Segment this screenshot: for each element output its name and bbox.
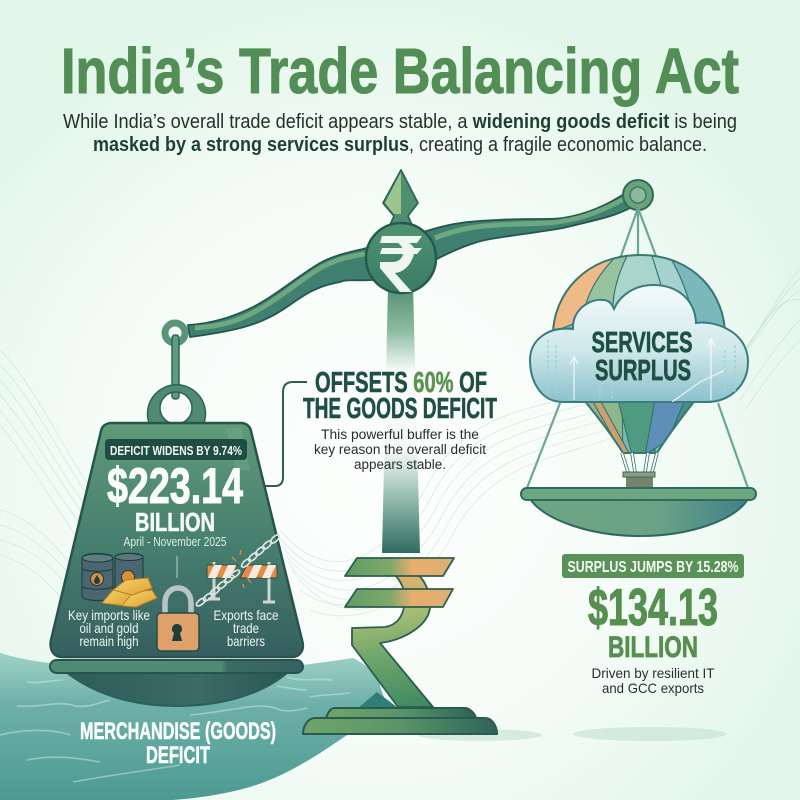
weight rim	[50, 660, 303, 673]
imports caption: remain high	[80, 633, 138, 649]
icon: gold bars	[102, 578, 157, 607]
ground shadows	[418, 727, 727, 741]
deficit growth pill	[105, 439, 247, 460]
cloud label: SERVICES	[592, 327, 692, 359]
surplus description	[592, 665, 715, 696]
deficit label: MERCHANDISE (GOODS)	[80, 718, 276, 745]
services surplus balloon	[521, 208, 756, 536]
exports caption: trade	[233, 620, 259, 636]
right beam end cap	[623, 180, 653, 210]
water	[0, 653, 385, 800]
callout description: key reason the overall deficit	[314, 442, 486, 457]
icon: sparks	[232, 550, 251, 588]
callout description: This powerful buffer is the	[321, 427, 479, 442]
deficit label: DEFICIT	[146, 742, 210, 769]
surplus panel	[562, 554, 744, 696]
balloon envelope	[545, 250, 730, 455]
balloon basket	[622, 453, 657, 489]
deficit value: $223.14	[107, 458, 243, 514]
rupee glyph	[380, 236, 422, 292]
left hook ring	[165, 323, 185, 343]
imports caption	[68, 607, 150, 649]
cloud label: SURPLUS	[595, 355, 691, 387]
icon: oil barrels	[82, 553, 143, 600]
exports caption: Exports face	[214, 607, 279, 623]
imports caption: Key imports like	[68, 607, 150, 623]
deficit period: April - November 2025	[124, 535, 227, 549]
icon: broken chain	[195, 533, 281, 607]
surplus growth pill	[562, 554, 744, 578]
weight body	[51, 423, 303, 657]
subtitle	[63, 111, 737, 156]
cloud label	[592, 327, 692, 387]
surplus description: and GCC exports	[602, 680, 704, 696]
surplus description: Driven by resilient IT	[592, 665, 715, 681]
stand base	[303, 692, 497, 734]
imports caption: oil and gold	[80, 620, 138, 636]
icon: trade barriers	[207, 562, 277, 602]
spear finial	[383, 170, 418, 225]
central rupee medallion	[366, 223, 436, 293]
deficit label	[80, 718, 276, 769]
background wave lines	[0, 268, 800, 640]
callout description	[314, 427, 486, 472]
balloon strings	[527, 208, 748, 488]
deficit growth pill: DEFICIT WIDENS BY 9.74%	[110, 443, 242, 458]
balance pan	[521, 488, 756, 536]
callout connector	[265, 382, 307, 486]
icon: padlock	[157, 588, 199, 651]
exports caption: barriers	[227, 633, 265, 649]
surplus value: $134.13	[588, 579, 718, 637]
balance beam	[165, 170, 653, 343]
exports caption	[214, 607, 279, 649]
icon: rupee symbol	[345, 558, 454, 707]
scale pole	[382, 285, 420, 553]
panel: goods deficit weight	[50, 385, 303, 706]
surplus unit: BILLION	[608, 631, 698, 664]
subtitle: masked by a strong services surplus, creating a fragile economic balance.	[93, 134, 707, 156]
callout heading: OFFSETS 60% OF	[315, 367, 487, 399]
weight bowl	[66, 672, 288, 706]
weight link	[172, 335, 179, 399]
deficit unit: BILLION	[135, 507, 215, 537]
callout description: appears stable.	[354, 457, 446, 472]
subtitle: While India’s overall trade deficit appears stable, a widening goods deficit is being	[63, 111, 737, 133]
weight ring	[148, 385, 205, 424]
cloud	[530, 285, 748, 402]
callout: offsets 60%	[303, 367, 497, 472]
callout heading	[303, 367, 497, 425]
surplus growth pill: SURPLUS JUMPS BY 15.28%	[568, 559, 739, 576]
callout heading: THE GOODS DEFICIT	[303, 393, 497, 425]
rupee stand	[303, 558, 497, 734]
